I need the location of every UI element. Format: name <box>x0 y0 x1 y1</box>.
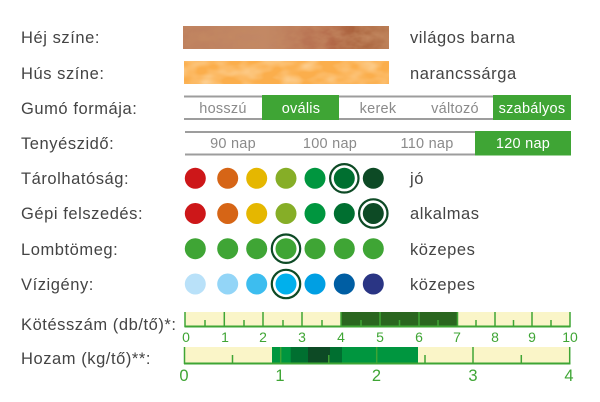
bar chart: Kötésszám: 10 <box>562 329 578 345</box>
dot scale: Tárolhatóság <box>185 164 384 192</box>
label: Hozam: Hozam (kg/tő)**: <box>21 350 151 368</box>
bar chart: Kötésszám: 8 <box>491 329 499 345</box>
tuber shape scale <box>184 95 571 120</box>
label: Gépi felszedés: Gépi felszedés: <box>21 205 143 223</box>
growing period scale: 100 nap <box>303 136 357 152</box>
dot scale: Lombtömeg <box>185 234 384 263</box>
label: Lombtömeg: Lombtömeg: <box>21 241 118 259</box>
bar chart: Hozam <box>179 347 574 385</box>
tuber shape scale: változó <box>431 101 479 117</box>
value: narancssárga: narancssárga <box>410 65 517 83</box>
swatch: flesh colour <box>184 61 389 84</box>
value: jó: jó <box>409 170 424 188</box>
bar chart: Kötésszám: 0 <box>182 329 190 345</box>
bar chart: Kötésszám: 4 <box>337 329 345 345</box>
growing period scale: 120 nap <box>496 136 550 152</box>
bar chart: Kötésszám <box>182 312 578 345</box>
label: Kötésszám: Kötésszám (db/tő)*: <box>21 316 177 334</box>
label: Hús színe: Hús színe: <box>21 65 105 83</box>
label: Tenyészidő: Tenyészidő: <box>21 135 114 153</box>
swatch: skin colour <box>183 26 389 49</box>
bar chart: Kötésszám: 1 <box>221 329 229 345</box>
bar chart: Kötésszám: 3 <box>298 329 306 345</box>
growing period scale <box>185 131 571 156</box>
tuber shape scale: hosszú <box>199 101 247 117</box>
bar chart: Hozam: 2 <box>372 367 381 385</box>
dot scale: Vízigény <box>185 270 384 298</box>
value: közepes (Lombtömeg): közepes <box>410 241 475 259</box>
label: Héj színe: Héj színe: <box>21 29 100 47</box>
dot scale: Gépi felszedés <box>185 199 387 228</box>
growing period scale: 110 nap <box>400 136 454 152</box>
tuber shape scale: kerek <box>360 101 397 117</box>
tuber shape scale: ovális <box>282 101 320 117</box>
label: Gumó formája: Gumó formája: <box>21 100 137 118</box>
bar chart: Kötésszám: 7 <box>453 329 461 345</box>
bar chart: Kötésszám: 9 <box>528 329 536 345</box>
tuber shape scale: szabályos <box>499 101 565 117</box>
bar chart: Hozam: 4 <box>564 367 574 385</box>
bar chart: Kötésszám: 2 <box>259 329 267 345</box>
bar chart: Hozam: 0 <box>179 367 189 385</box>
label: Vízigény: Vízigény: <box>21 276 94 294</box>
bar chart: Hozam: 1 <box>275 367 285 385</box>
growing period scale: 90 nap <box>210 136 256 152</box>
value: alkalmas: alkalmas <box>410 205 480 223</box>
bar chart: Kötésszám: 5 <box>376 329 384 345</box>
bar chart: Hozam: 3 <box>468 367 478 385</box>
value: világos barna: világos barna <box>410 29 516 47</box>
bar chart: Kötésszám: 6 <box>415 329 423 345</box>
label: Tárolhatóság: Tárolhatóság: <box>21 170 129 188</box>
value: közepes (Vízigény): közepes <box>410 276 475 294</box>
